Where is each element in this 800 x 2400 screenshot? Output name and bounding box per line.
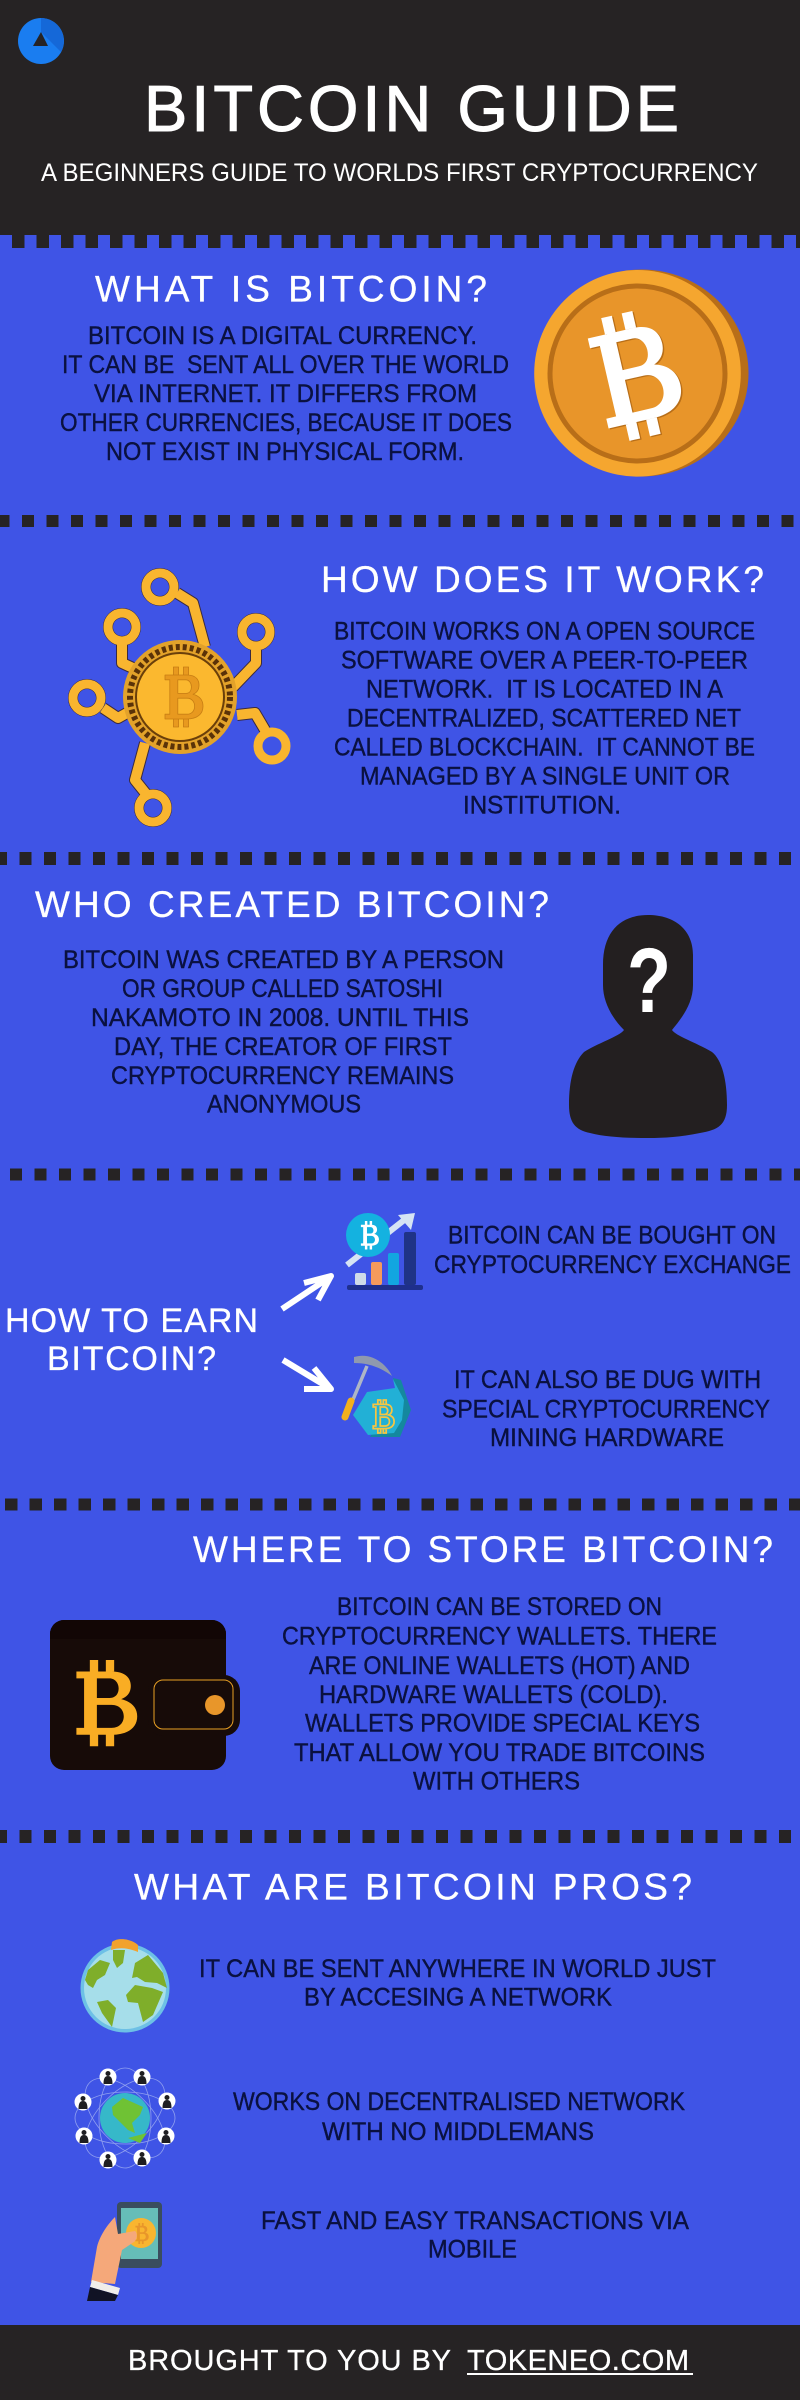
text block: VIA INTERNET. IT DIFFERS FROM [94,380,477,408]
text block: DAY, THE CREATOR OF FIRST [114,1033,452,1061]
text block [63,946,504,1118]
arrow: up to exchange [282,1276,331,1309]
panel: how does it work [73,559,764,822]
text block: ANONYMOUS [207,1090,361,1118]
text block: WORKS ON DECENTRALISED NETWORK [233,2088,685,2116]
text block: ARE ONLINE WALLETS (HOT) AND [309,1652,690,1680]
icon: mobile payment [87,2202,162,2301]
text block: BITCOIN IS A DIGITAL CURRENCY. [88,322,477,350]
heading: BITCOIN? [47,1340,216,1378]
heading: WHO CREATED BITCOIN? [35,884,549,925]
icon: globe [80,1939,170,2032]
title: BITCOIN GUIDE [144,72,679,145]
text block: IT CAN BE SENT ALL OVER THE WORLD [62,351,509,379]
text block: MANAGED BY A SINGLE UNIT OR [360,762,730,790]
footer band [0,2325,800,2400]
text block: NETWORK. IT IS LOCATED IN A [366,676,723,704]
panel: what are bitcoin pros [71,1866,716,2301]
panel: what is bitcoin [60,268,748,477]
text block: BITCOIN WAS CREATED BY A PERSON [63,946,504,974]
text block: WITH OTHERS [413,1768,580,1796]
text block [261,2207,689,2264]
text block: NOT EXIST IN PHYSICAL FORM. [106,438,464,466]
text block: mining: IT CAN ALSO BE DUG WITH [454,1366,761,1394]
footer credit [128,2345,693,2377]
text block: mining: MINING HARDWARE [490,1424,724,1452]
panel: who created bitcoin [35,884,727,1138]
icon: decentralised network [71,2064,179,2172]
text block [334,618,755,820]
panel: where to store bitcoin [50,1529,773,1796]
text block [282,1593,717,1796]
text block: mining: SPECIAL CRYPTOCURRENCY [442,1396,770,1424]
heading: WHERE TO STORE BITCOIN? [193,1529,773,1570]
text block: IT CAN BE SENT ANYWHERE IN WORLD JUST [199,1955,716,1983]
text block: FAST AND EASY TRANSACTIONS VIA [261,2207,689,2235]
footer credit: BROUGHT TO YOU BY [128,2345,451,2377]
text block: THAT ALLOW YOU TRADE BITCOINS [294,1739,705,1767]
text block: CRYPTOCURRENCY WALLETS. THERE [282,1622,717,1650]
header band [0,0,800,242]
heading: HOW TO EARN [5,1302,258,1340]
text block: CRYPTOCURRENCY REMAINS [111,1062,454,1090]
text block: MOBILE [428,2236,517,2264]
text block: WITH NO MIDDLEMANS [322,2118,594,2146]
text block: NAKAMOTO IN 2008. UNTIL THIS [91,1004,469,1032]
text block: DECENTRALIZED, SCATTERED NET [347,704,741,732]
question mark: ? [627,930,671,1032]
text block: INSTITUTION. [463,792,621,820]
text block [233,2088,685,2146]
icon: exchange chart [346,1213,423,1290]
text block: exchange [434,1222,791,1279]
icon: bitcoin network [73,573,286,822]
icon: bitcoin coin [534,270,748,477]
text block: BITCOIN WORKS ON A OPEN SOURCE [334,618,755,646]
subtitle: A BEGINNERS GUIDE TO WORLDS FIRST CRYPTOCURRENCY [41,159,758,187]
text block: BY ACCESING A NETWORK [304,1984,612,2012]
text block: OR GROUP CALLED SATOSHI [122,975,443,1003]
panel: how to earn bitcoin [5,1213,791,1452]
heading: HOW DOES IT WORK? [321,559,764,600]
footer credit: TOKENEO.COM [467,2345,689,2377]
text block: mining [442,1366,770,1452]
icon: wallet [50,1620,240,1770]
text block: exchange: BITCOIN CAN BE BOUGHT ON [448,1222,776,1250]
heading [5,1302,258,1378]
text block: CALLED BLOCKCHAIN. IT CANNOT BE [334,734,755,762]
icon: mining pickaxe [345,1356,411,1437]
heading: WHAT ARE BITCOIN PROS? [134,1866,692,1908]
text block: OTHER CURRENCIES, BECAUSE IT DOES [60,409,512,437]
icon: logo [18,18,64,64]
text block [199,1955,716,2012]
heading: WHAT IS BITCOIN? [95,268,487,310]
arrow: down to mining [283,1360,331,1389]
text block: HARDWARE WALLETS (COLD). [319,1681,668,1709]
text block: BITCOIN CAN BE STORED ON [337,1593,662,1621]
text block [60,322,512,466]
icon: anonymous person [569,915,727,1138]
text block: SOFTWARE OVER A PEER-TO-PEER [341,646,748,674]
text block: WALLETS PROVIDE SPECIAL KEYS [305,1710,700,1738]
